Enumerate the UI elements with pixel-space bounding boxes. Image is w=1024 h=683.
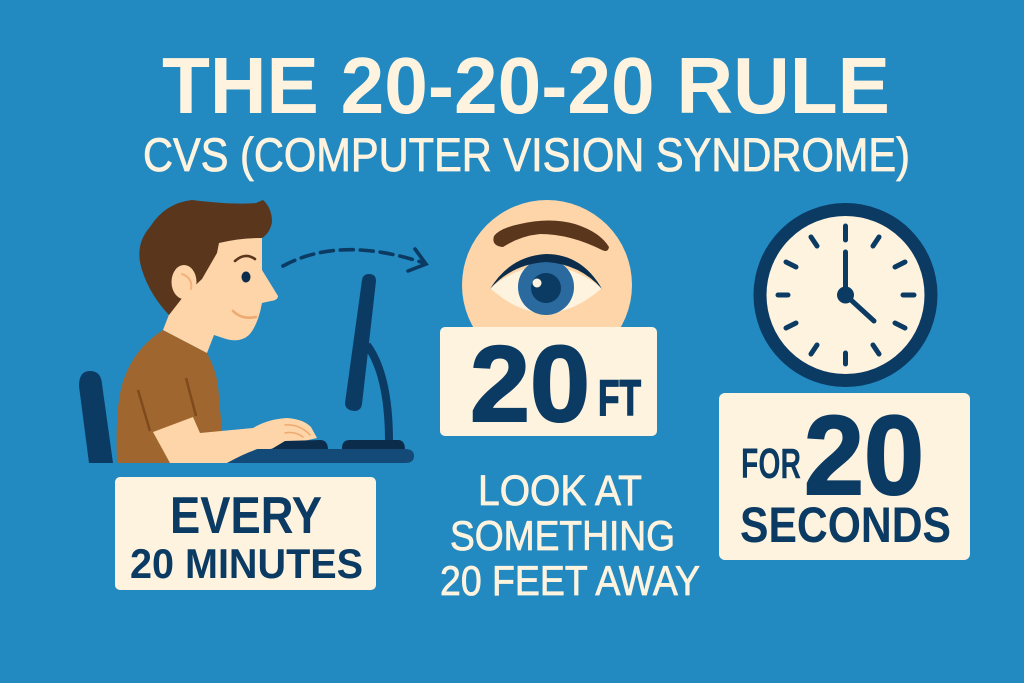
eye white xyxy=(490,266,602,313)
caption: look at something 20 feet away: 20 FEET AWAY xyxy=(440,557,700,604)
label text: for: FOR xyxy=(741,440,801,488)
clock hands xyxy=(846,252,874,321)
icon: person at computer xyxy=(79,200,426,463)
title: THE 20-20-20 RULE xyxy=(162,41,890,130)
icon: clock xyxy=(760,210,931,380)
torso shirt xyxy=(117,330,222,463)
highlight xyxy=(532,278,542,288)
caption: look at something 20 feet away: LOOK AT xyxy=(478,467,642,515)
caption: look at something 20 feet away: SOMETHING xyxy=(450,512,675,559)
desk xyxy=(227,449,414,463)
arrow: dashed gaze xyxy=(283,249,426,271)
eyebrow xyxy=(235,256,255,261)
label text: 20: 20 xyxy=(470,323,590,444)
label box: every 20 minutes xyxy=(115,477,376,590)
neck and face xyxy=(163,235,278,353)
eyebrow xyxy=(493,220,609,251)
pupil xyxy=(531,273,561,303)
monitor base xyxy=(342,440,405,450)
panel: every 20 minutes xyxy=(79,200,426,590)
iris xyxy=(518,259,574,315)
eye xyxy=(242,272,250,282)
shirt folds xyxy=(138,378,196,431)
smile xyxy=(233,311,256,318)
finger lines xyxy=(285,425,310,437)
arm and hand xyxy=(153,417,317,463)
panel: 20 seconds xyxy=(719,210,970,560)
label text: 20 minutes: 20 MINUTES xyxy=(130,540,363,587)
panel: 20 feet xyxy=(440,200,700,604)
label box: 20 ft xyxy=(440,327,657,436)
icon: eye xyxy=(462,200,632,370)
label text: 20: 20 xyxy=(804,393,924,518)
eyelid xyxy=(490,254,602,289)
label text: ft: FT xyxy=(598,370,641,426)
caption: look at something 20 feet away xyxy=(440,467,700,604)
label text: seconds: SECONDS xyxy=(740,497,951,553)
keyboard xyxy=(270,440,328,450)
label text: every: EVERY xyxy=(170,487,322,545)
chair back xyxy=(79,371,113,463)
hair xyxy=(139,200,272,315)
skin circle xyxy=(462,200,632,370)
monitor stand xyxy=(367,345,389,442)
clock center xyxy=(837,286,854,304)
clock face xyxy=(760,210,931,380)
ear xyxy=(172,265,196,299)
monitor screen xyxy=(345,274,376,411)
ear detail xyxy=(182,274,191,289)
label box: for 20 seconds xyxy=(719,393,970,560)
hour ticks xyxy=(778,226,914,364)
subtitle: CVS (COMPUTER VISION SYNDROME) xyxy=(143,128,910,181)
